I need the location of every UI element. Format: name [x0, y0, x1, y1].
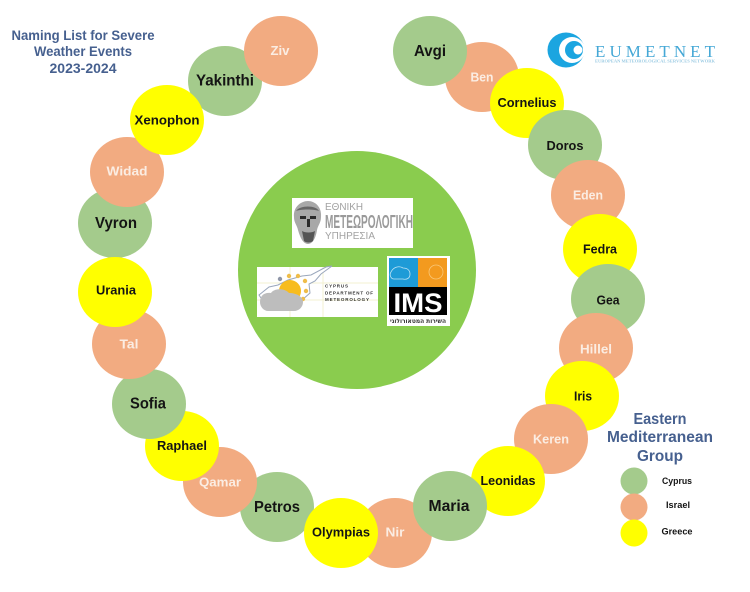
logo: Israel Meteorological Service: השירות המטאורולוגי	[390, 318, 446, 325]
name: Ziv: Ziv	[270, 43, 290, 58]
name: Maria: Maria	[428, 498, 470, 515]
logo: Israel Meteorological Service	[387, 256, 450, 326]
name: Avgi	[393, 16, 467, 86]
name: Ben	[445, 42, 519, 112]
name: Urania	[78, 257, 152, 327]
name: Vyron	[78, 188, 152, 258]
legend title: Eastern	[634, 411, 686, 428]
legend item: Israel: Israel	[666, 500, 690, 511]
logo: Hellenic National Meteorological Service	[292, 198, 413, 248]
name: Iris	[545, 361, 619, 431]
name: Vyron: Vyron	[95, 215, 137, 232]
title: Naming List for Severe	[12, 28, 155, 43]
name: Nir	[358, 498, 432, 568]
name: Cornelius	[490, 68, 564, 138]
name: Sofia	[112, 369, 186, 439]
name: Sofia: Sofia	[130, 396, 166, 412]
name: Tal: Tal	[120, 336, 138, 352]
name: Petros	[240, 472, 314, 542]
name: Fedra	[563, 214, 637, 284]
name: Yakinthi	[188, 46, 262, 116]
name: Qamar: Qamar	[199, 474, 241, 490]
name: Yakinthi: Yakinthi	[196, 72, 254, 90]
logo: Cyprus Department of Meteorology: DEPARTMENT OF	[325, 290, 373, 296]
name: Ziv	[244, 16, 318, 86]
name: Olympias: Olympias	[312, 524, 370, 540]
name: Doros: Doros	[546, 138, 584, 153]
name: Xenophon	[130, 85, 204, 155]
logo: EUMETNET: EUROPEAN METEOROLOGICAL SERVICES NETWORK	[595, 58, 715, 64]
name: Maria	[413, 471, 487, 541]
name: Iris: Iris	[574, 388, 592, 404]
name: Cornelius: Cornelius	[498, 95, 556, 110]
name: Olympias	[304, 498, 378, 568]
name: Qamar	[183, 447, 257, 517]
name: Hillel	[559, 313, 633, 383]
title	[12, 28, 155, 76]
name: Widad	[90, 137, 164, 207]
name: Xenophon: Xenophon	[134, 112, 200, 128]
name: Avgi: Avgi	[414, 43, 446, 60]
logo: Cyprus Department of Meteorology	[257, 266, 378, 317]
name: Urania: Urania	[96, 282, 137, 298]
name: Gea	[571, 264, 645, 334]
legend item: Greece: Greece	[662, 526, 692, 538]
logo: Israel Meteorological Service: IMS	[394, 288, 442, 318]
name: Leonidas	[471, 446, 545, 516]
title: 2023-2024	[50, 61, 117, 76]
name: Tal	[92, 309, 166, 379]
name: Leonidas: Leonidas	[480, 473, 536, 488]
name: Eden: Eden	[573, 188, 603, 202]
name: Fedra: Fedra	[583, 242, 618, 256]
name: Keren	[514, 404, 588, 474]
logo: EUMETNET: EUMETNET	[595, 42, 716, 61]
name: Gea: Gea	[596, 292, 620, 308]
logo: Hellenic National Meteorological Service: ΕΘΝΙΚΗ	[325, 202, 363, 213]
logo: Cyprus Department of Meteorology: CYPRUS	[325, 284, 348, 288]
name: Raphael: Raphael	[157, 438, 207, 453]
logo: Hellenic National Meteorological Service: ΥΠΗΡΕΣΙΑ	[325, 231, 375, 242]
name: Ben: Ben	[470, 70, 494, 84]
legend item: Cyprus: Cyprus	[662, 476, 692, 487]
name: Doros	[528, 110, 602, 180]
logo: Hellenic National Meteorological Service: ΜΕΤΕΩΡΟΛΟΓΙΚΗ	[325, 212, 413, 232]
name: Widad: Widad	[106, 164, 148, 178]
name: Nir: Nir	[386, 524, 404, 540]
legend title	[607, 411, 713, 465]
name: Raphael	[145, 411, 219, 481]
name: Eden	[551, 160, 625, 230]
legend title: Group	[637, 448, 683, 465]
title: Weather Events	[34, 44, 132, 59]
name: Keren: Keren	[533, 432, 569, 446]
logo: EUMETNET	[548, 32, 716, 68]
legend	[607, 411, 713, 546]
name: Petros: Petros	[254, 499, 300, 516]
central circle with member logos	[238, 151, 476, 389]
legend title: Mediterranean	[607, 429, 713, 446]
name: Hillel: Hillel	[580, 342, 612, 356]
logo: Cyprus Department of Meteorology: METEOROLOGY	[325, 297, 369, 302]
